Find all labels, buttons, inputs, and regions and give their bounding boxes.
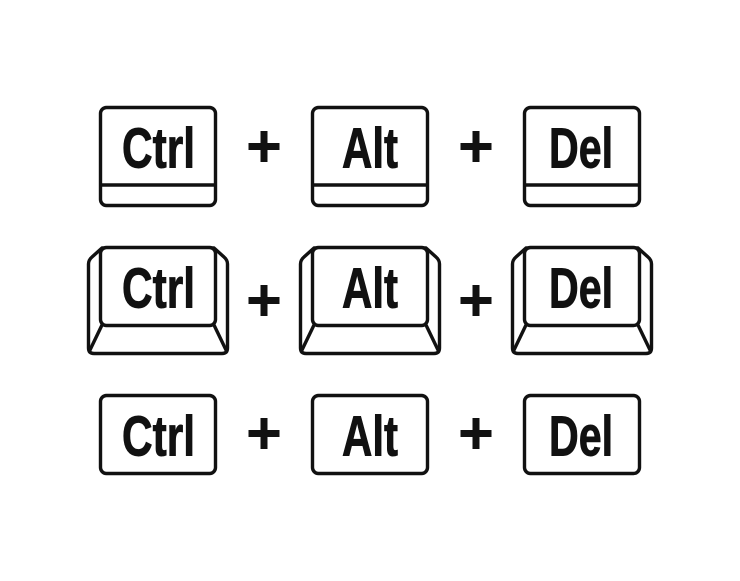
key: Ctrl: Ctrl: [122, 116, 195, 180]
key: Del: [512, 248, 652, 354]
key: Ctrl: [88, 248, 228, 354]
plus sign: [460, 418, 492, 449]
plus sign: [460, 285, 492, 316]
key: Alt: Alt: [342, 256, 398, 320]
row 3: flat outline keys: [100, 396, 640, 474]
row 1: flat keys with bottom edge: [100, 108, 640, 206]
key: Del: Del: [549, 256, 613, 320]
key: Alt: [312, 108, 428, 206]
plus sign: [248, 285, 280, 316]
key: Ctrl: Ctrl: [122, 404, 195, 468]
key: Ctrl: [100, 396, 216, 474]
key: Ctrl: Ctrl: [122, 256, 195, 320]
key: Del: Del: [549, 404, 613, 468]
plus sign: [248, 131, 280, 162]
key: Alt: Alt: [342, 116, 398, 180]
row 2: 3D beveled keys: [88, 248, 652, 354]
key: Ctrl: [100, 108, 216, 206]
key: Del: [524, 396, 640, 474]
key: Alt: [312, 396, 428, 474]
key: Del: [524, 108, 640, 206]
key: Del: Del: [549, 116, 613, 180]
key: Alt: [300, 248, 440, 354]
key: Alt: Alt: [342, 404, 398, 468]
plus sign: [248, 418, 280, 449]
plus sign: [460, 131, 492, 162]
